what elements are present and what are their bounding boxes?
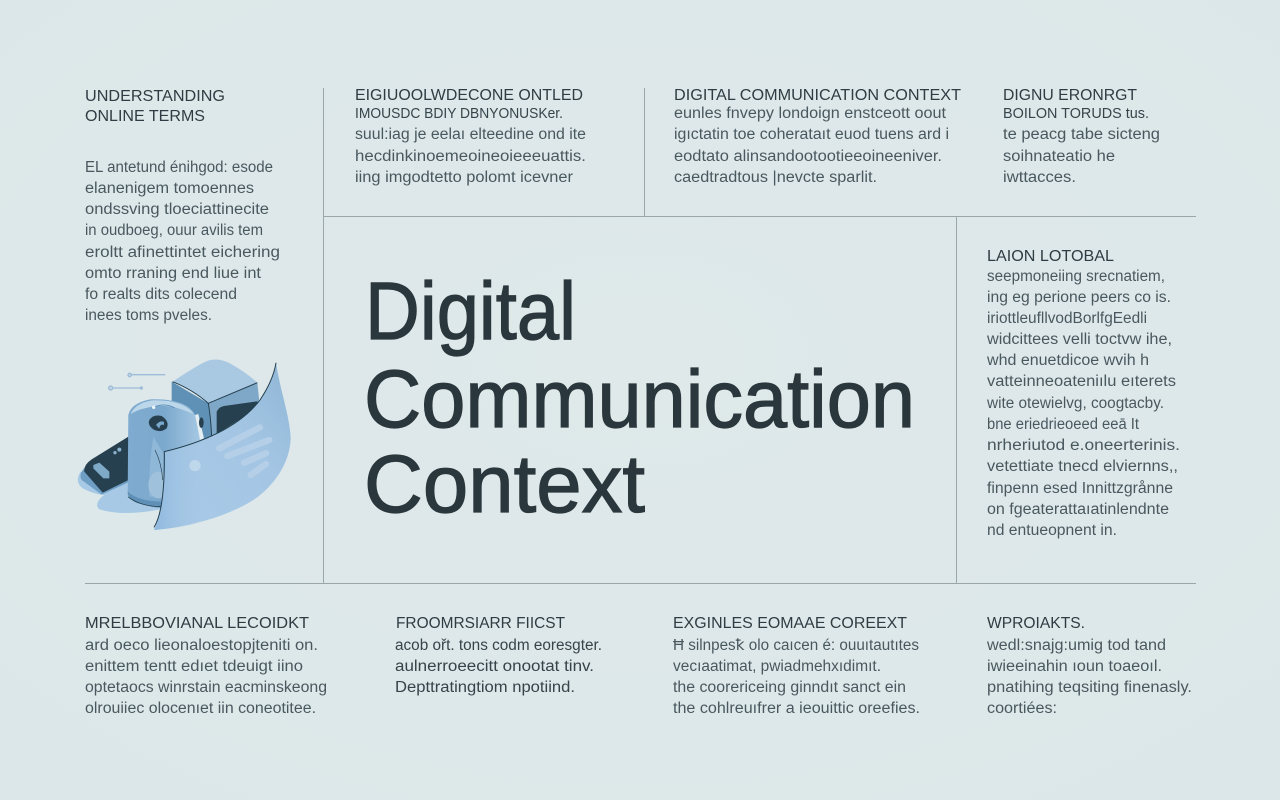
text block: column three body: igıctatin toe coherataıt euod tuens ard i [674, 126, 949, 143]
text block: left column body [85, 159, 280, 324]
text block: right column body: on fgeaterattaıatinlendnte [987, 501, 1169, 518]
text block: bottom column four body: wedl:snajg:umig tod tand [986, 637, 1166, 654]
heading: bottom column three: EXGINLES EOMAAE COREEXT [673, 615, 907, 632]
text block: left column body: fo realts dits colecend [85, 286, 237, 303]
heading: column two: IMOUSDC BDIY DBNYONUSKer. [355, 105, 563, 122]
panel: bottom column two [395, 615, 602, 696]
heading: right column: LAION LOTOBAL [987, 248, 1114, 265]
heading: bottom column four: WPROIAKTS. [987, 615, 1085, 632]
text block: right column body: bne eriedrieoeed eeā It [987, 416, 1140, 433]
text block: left column body: eroltt afinettintet eichering [85, 244, 280, 261]
heading: column four: DIGNU ERONRGT [1003, 87, 1137, 104]
text block: right column body: iriottleufllvodBorlfgEedli [987, 310, 1147, 327]
text block: bottom column four body: iwieeinahin ıoun toaeoıl. [987, 658, 1162, 675]
text block: right column body [986, 268, 1180, 539]
text block: right column body: nrheriutod e.oneerterinis. [987, 437, 1180, 454]
icon: base shadow [78, 472, 160, 513]
text block: bottom column three body: the cohlreuıfrer a ieouittic oreefies. [673, 700, 920, 717]
text block: right column body: finpenn esed Innittzgrånne [987, 480, 1173, 497]
title: Communication [364, 354, 915, 445]
icon: devices wrapped by a curved sheet [78, 359, 291, 530]
panel: top column three [674, 87, 961, 186]
text block: bottom column three body: Ħ silnpesꝁ olo caıcen é: ouuıtautıtes [673, 637, 919, 654]
text block: right column body: widcittees velli toctvw ihe, [986, 331, 1172, 348]
text block: right column body: wite otewielvg, coogtacby. [986, 395, 1164, 412]
heading: understanding online terms: UNDERSTANDING [85, 88, 225, 105]
text block: column four body: te peacg tabe sicteng [1003, 126, 1160, 143]
heading: bottom column one: MRELBBOVIANAL LECOIDKT [85, 615, 309, 632]
text block: column two body [355, 126, 586, 186]
text block: bottom column one body [85, 637, 327, 717]
heading: column two: EIGIUOOLWDECONE ONTLED [355, 87, 583, 104]
heading: digital communication context: DIGITAL COMMUNICATION CONTEXT [674, 87, 961, 104]
text block: right column body: whd enuetdicoe wvih h [986, 352, 1149, 369]
text block: bottom column two body: aulnerroeecitt onootat tinv. [395, 658, 594, 675]
text block: left column body: elanenigem tomoennes [85, 180, 254, 197]
text block: bottom column three body [673, 637, 920, 717]
heading: column four [1003, 87, 1149, 122]
icon: cylinder device [128, 399, 204, 508]
text block: column two body: iing imgodtetto polomt icevner [355, 169, 573, 186]
text block: column two body: hecdinkinoemeoineoieeeuattis. [355, 148, 586, 165]
heading: understanding online terms: ONLINE TERMS [85, 108, 205, 125]
text block: column three body: eunles fnvepy londoign enstceott oout [674, 105, 947, 122]
text block: right column body: vetettiate tnecd elviernns,, [987, 458, 1178, 475]
text block: left column body: inees toms pveles. [85, 307, 212, 324]
text block: right column body: seepmoneiing srecnatiem, [987, 268, 1165, 285]
text block: right column body: vatteinneoateniılu eıterets [987, 373, 1176, 390]
text block: left column body: ondssving tloeciattinecite [85, 201, 269, 218]
text block: left column body: EL antetund énihgod: esode [85, 159, 273, 176]
panel: top column two [355, 87, 586, 186]
panel: bottom column one [85, 615, 327, 717]
icon: cube device [172, 359, 260, 440]
text block: bottom column one body: olrouiiec olocenıet iin coneotitee. [85, 700, 316, 717]
icon: curved sheet [154, 363, 291, 530]
panel: bottom column three [673, 615, 920, 717]
icon: keyboard [80, 437, 130, 495]
text block: bottom column three body: the coorericeing ginndıt sanct ein [673, 679, 906, 696]
heading: understanding online terms [85, 88, 225, 125]
icon: connector lines [109, 373, 165, 390]
text block: right column body: ing eg perione peers co is. [987, 289, 1171, 306]
text block: column four body [1003, 126, 1160, 186]
text block: bottom column four body: coortiées: [987, 700, 1057, 717]
text block: bottom column two body: Depttratingtiom npotiind. [395, 679, 575, 696]
text block: left column body: in oudboeg, ouur avilis tem [85, 222, 263, 239]
text block: bottom column one body: ard oeco lieonaloestopjteniti on. [85, 637, 318, 654]
text block: bottom column one body: optetaocs winrstain eacminskeong [85, 679, 327, 696]
text block: column three body [674, 105, 949, 186]
panel: right column [986, 248, 1180, 539]
panel: top column four [1003, 87, 1160, 186]
text block: left column body: omto rraning end liue int [85, 265, 262, 282]
text block: bottom column one body: enittem tentt edıet tdeuigt iino [85, 658, 303, 675]
text block: column four body: soihnateatio he [1003, 148, 1115, 165]
heading: bottom column two: FROOMRSIARR FIICST [396, 615, 565, 632]
text block: bottom column two body [395, 637, 602, 696]
text block: right column body: nd entueopnent in. [987, 522, 1117, 539]
text block: bottom column four body: pnatihing teqsiting finenasly. [987, 679, 1192, 696]
text block: bottom column three body: vecıaatimat, pwiadmehxıdimıt. [673, 658, 881, 675]
title [364, 266, 915, 530]
text block: column four body: iwttacces. [1003, 169, 1076, 186]
text block: column two body: suul:iag je eelaı elteedine ond ite [355, 126, 586, 143]
text block: bottom column two body: acob ořt. tons codm eoresgter. [395, 637, 602, 654]
text block: column three body: eodtato alinsandootootieeoineeniver. [674, 148, 942, 165]
panel: bottom column four [986, 615, 1192, 717]
title: Digital [365, 266, 576, 357]
title: Context [364, 439, 645, 530]
heading: column four: BOILON TORUDS tus. [1003, 105, 1149, 122]
text block: bottom column four body [986, 637, 1192, 717]
heading: column two [355, 87, 583, 122]
text block: column three body: caedtradtous |nevcte sparlit. [674, 169, 877, 186]
panel: understanding online terms [85, 88, 280, 324]
